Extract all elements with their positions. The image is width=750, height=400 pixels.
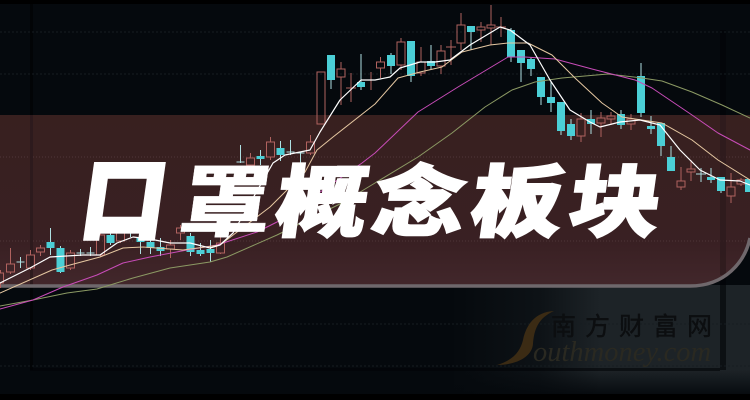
MA20 magenta line	[0, 57, 750, 309]
title: 口	[74, 129, 177, 259]
logo swoosh S	[497, 311, 554, 365]
red translucent band	[0, 115, 750, 286]
title: 罩	[174, 139, 281, 253]
title: 念	[367, 139, 474, 253]
watermark logo	[497, 307, 721, 368]
MA10 tan line	[0, 43, 750, 293]
candlestick chart	[0, 5, 750, 288]
title: 块	[563, 139, 670, 253]
title: 概	[270, 139, 377, 253]
cyan wicks	[16, 26, 749, 273]
MA60 green line	[0, 74, 750, 306]
logo chinese name: 南方财富网	[551, 307, 721, 343]
MA5 white line	[0, 27, 750, 283]
watermark glow	[450, 285, 750, 394]
band border	[0, 238, 750, 286]
title	[74, 129, 670, 259]
cyan candle bodies	[46, 26, 750, 272]
moving average lines	[0, 27, 750, 309]
logo latin name: outhmoney.com	[533, 337, 711, 368]
red candles	[0, 5, 745, 288]
title: 板	[465, 139, 572, 253]
